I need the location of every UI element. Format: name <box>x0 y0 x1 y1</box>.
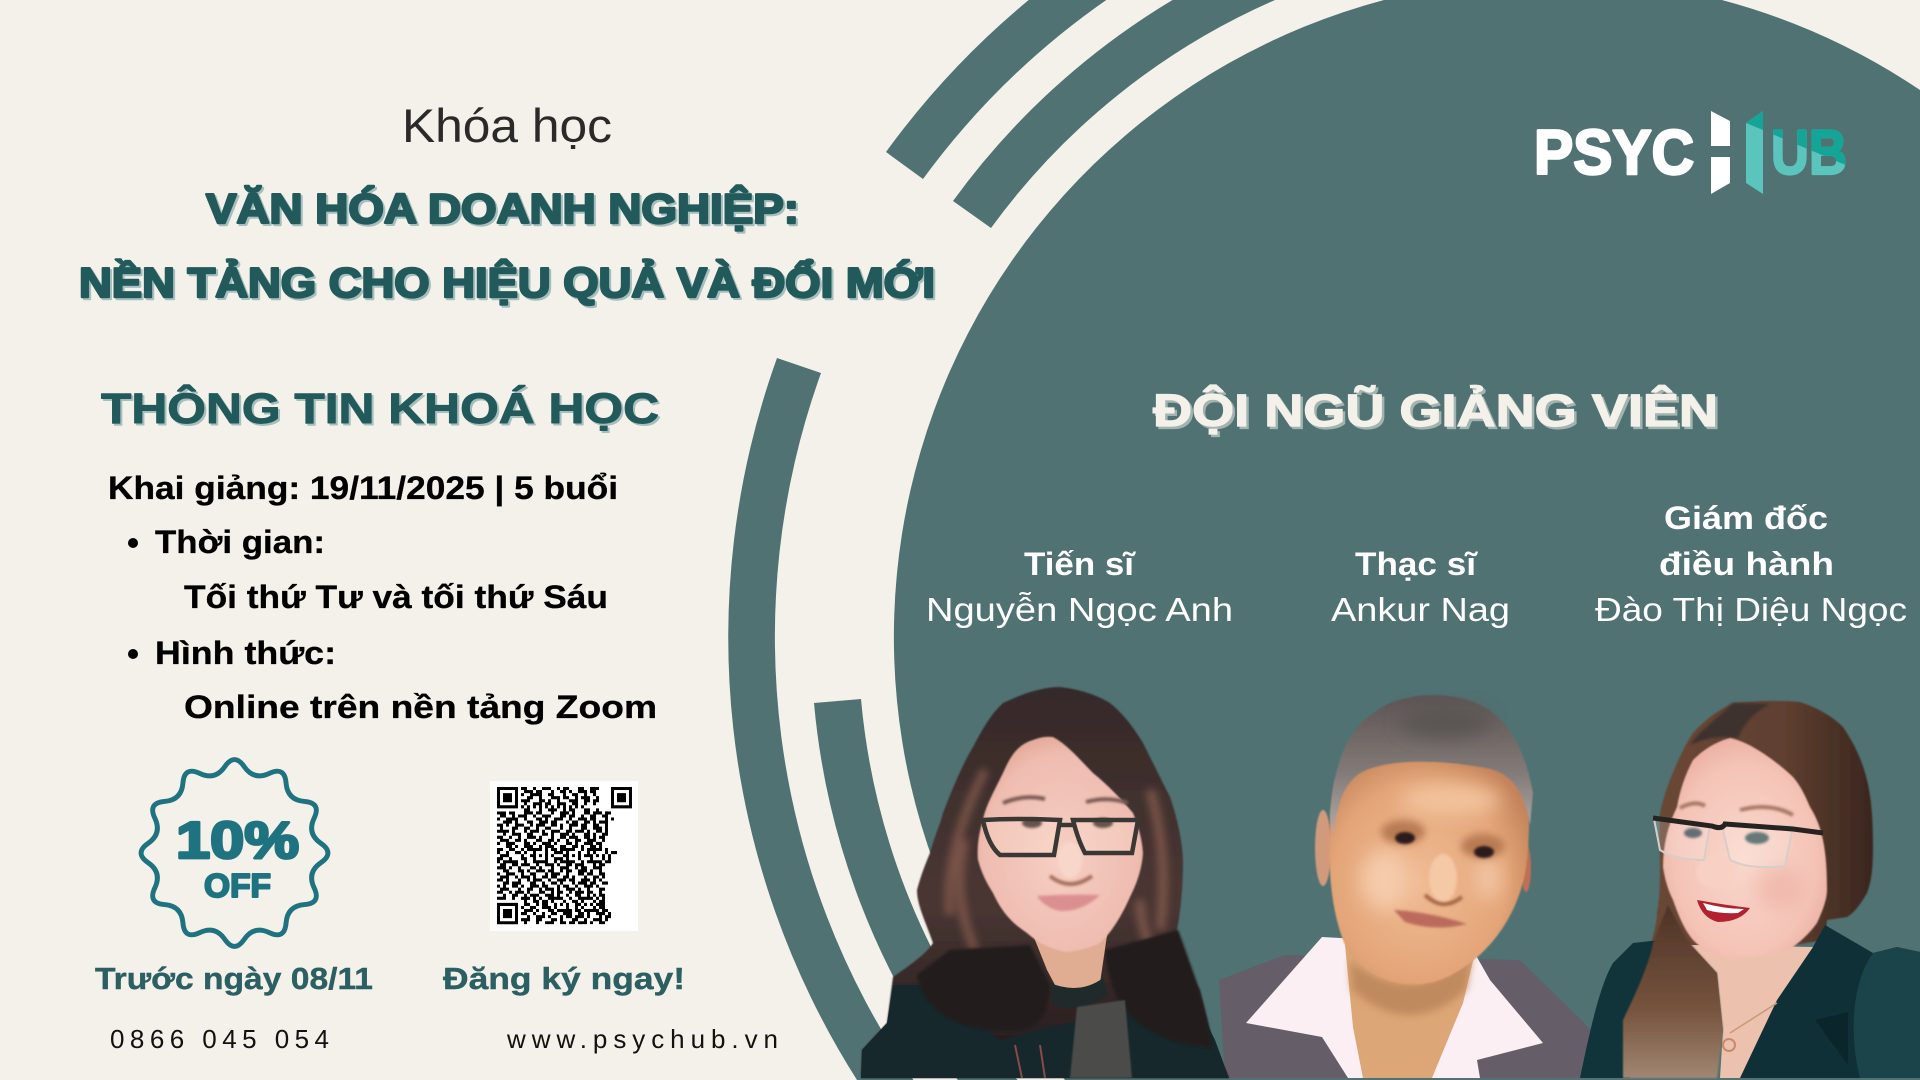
hair <box>1330 695 1533 835</box>
arc: left outer <box>728 358 913 1080</box>
sheer chest <box>1070 1000 1132 1078</box>
jacket sleeve <box>1854 947 1920 1078</box>
format label: Hình thức: <box>155 635 336 671</box>
lecturer 3 caption: Giám đốc <box>1664 500 1828 536</box>
face <box>1329 757 1529 984</box>
arc: top outer <box>886 0 1106 179</box>
teal main circle panel <box>894 0 1920 1080</box>
discount deadline: Trước ngày 08/11 <box>95 961 373 996</box>
face <box>978 737 1143 952</box>
lecturer 1 caption: Tiến sĩ <box>1024 546 1136 582</box>
hair part <box>1690 703 1770 745</box>
off label: OFF <box>204 867 271 904</box>
chest <box>1690 945 1813 1078</box>
course label: Khóa học <box>402 99 612 152</box>
hair streaks <box>949 770 1185 1000</box>
bullet: format <box>128 649 138 659</box>
neck shadow <box>1350 955 1472 1015</box>
jacket right <box>1738 925 1920 1078</box>
QR modules <box>497 787 632 924</box>
lecturer 3 caption: Đào Thị Diệu Ngọc <box>1595 591 1907 628</box>
shirt <box>1246 937 1543 1078</box>
face <box>1663 738 1827 958</box>
straps <box>1015 1045 1045 1078</box>
course info details <box>108 470 657 725</box>
ears <box>1315 810 1331 886</box>
blouse <box>861 985 1229 1078</box>
lapel shadow <box>1815 1012 1848 1065</box>
logo door right <box>1746 111 1763 194</box>
logo wordmark PSYC: PSYC <box>1534 118 1694 188</box>
course title: VĂN HÓA DOANH NGHIỆP: <box>206 184 799 232</box>
logo letters UB: UB <box>1771 118 1847 188</box>
arc: left inner <box>814 699 1018 1080</box>
lace collar <box>1050 978 1108 1008</box>
cheek blush <box>1755 866 1805 910</box>
lecturer 2 caption: Thạc sĩ <box>1355 546 1478 582</box>
long hair strand <box>1623 905 1723 1078</box>
glasses <box>1654 819 1793 867</box>
hair <box>861 687 1229 1078</box>
logo letters UB <box>1773 129 1846 176</box>
portrait: lecturer 2 <box>1219 695 1591 1078</box>
lecturer 3 caption <box>1595 500 1907 628</box>
facial features <box>1680 803 1793 889</box>
glasses <box>983 819 1138 855</box>
lips <box>1697 900 1750 922</box>
lecturer 2 caption: Ankur Nag <box>1331 591 1510 628</box>
time label: Thời gian: <box>155 524 325 560</box>
hair <box>1650 701 1873 960</box>
website: www.psychub.vn <box>506 1024 778 1054</box>
jacket left <box>1580 940 1660 1078</box>
portrait: lecturer 3 <box>1580 701 1920 1078</box>
register call to action: Đăng ký ngay! <box>443 961 685 996</box>
QR background <box>490 781 638 931</box>
lecturer 1 caption: Nguyễn Ngọc Anh <box>926 591 1233 628</box>
start date: Khai giảng: 19/11/2025 | 5 buổi <box>108 470 618 506</box>
bullet: time <box>128 538 138 548</box>
glasses top frame <box>1653 818 1823 833</box>
QR finder patterns <box>497 787 632 924</box>
logo: PsycHub <box>1534 111 1847 194</box>
neck <box>1345 940 1478 1078</box>
hair lower curls <box>917 930 1212 1048</box>
neck <box>1025 915 1110 990</box>
lecturer 3 caption: điều hành <box>1659 546 1834 582</box>
necklace <box>1730 1003 1777 1033</box>
course title: NỀN TẢNG CHO HIỆU QUẢ VÀ ĐỔI MỚI <box>79 257 935 306</box>
facial features <box>1003 797 1128 911</box>
hair crown shadow <box>1399 706 1491 738</box>
face shading <box>1361 784 1505 910</box>
discount percent: 10% <box>176 812 299 870</box>
logo door left <box>1711 111 1730 194</box>
heading: course info: THÔNG TIN KHOÁ HỌC <box>101 384 659 433</box>
time value: Tối thứ Tư và tối thứ Sáu <box>184 579 608 615</box>
portrait: lecturer 1 <box>861 687 1229 1078</box>
format value: Online trên nền tảng Zoom <box>184 689 657 725</box>
phone number: 0866 045 054 <box>110 1024 329 1054</box>
arc: top inner <box>953 0 1275 228</box>
badge outline <box>141 760 328 946</box>
QR code <box>490 781 638 931</box>
lecturer 1 caption <box>926 546 1233 628</box>
facial features <box>1394 832 1494 928</box>
logo letters UB: UB <box>1771 118 1847 188</box>
discount badge <box>141 760 328 946</box>
jacket <box>1219 955 1591 1078</box>
course title <box>79 184 935 306</box>
lecturer 2 caption <box>1331 546 1510 628</box>
heading: teaching team: ĐỘI NGŨ GIẢNG VIÊN <box>1153 385 1718 436</box>
